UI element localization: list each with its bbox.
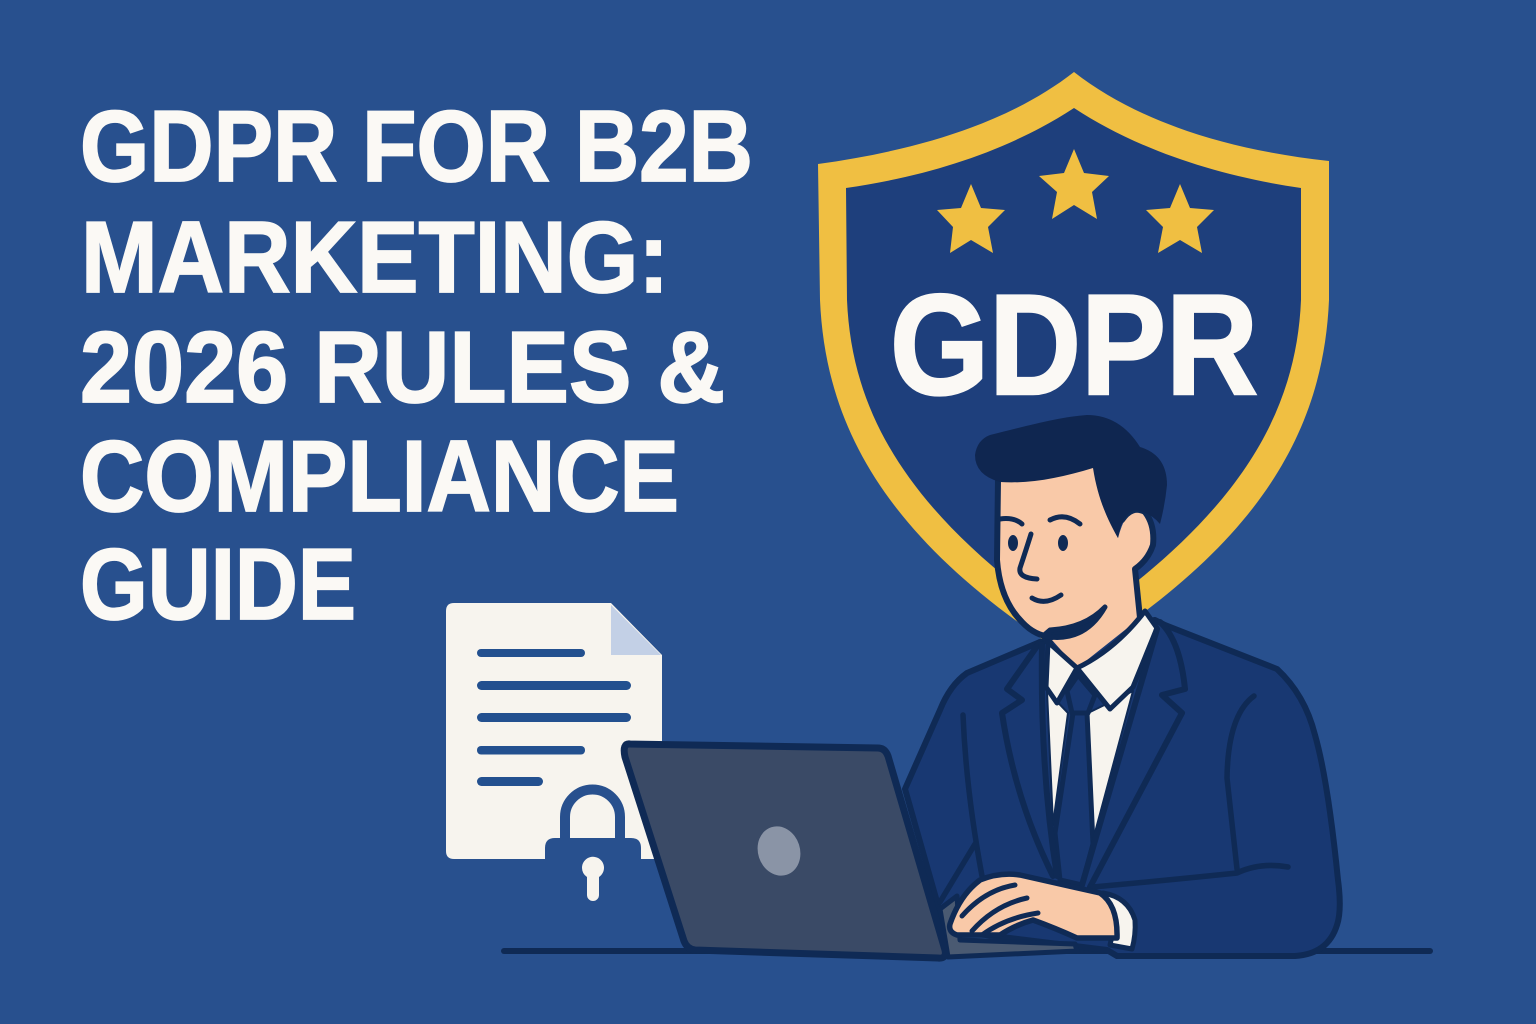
stars: [937, 149, 1214, 253]
necktie: [1055, 675, 1095, 885]
jaw shadow: [1043, 607, 1105, 637]
title: 2026 RULES &: [80, 312, 725, 424]
page fold: [611, 605, 661, 655]
title: GDPR FOR B2B: [80, 91, 753, 203]
businessman: [905, 415, 1340, 957]
neck and ear outline: [1122, 510, 1153, 618]
title: GUIDE: [80, 529, 356, 641]
laptop logo: [751, 821, 807, 881]
title: COMPLIANCE: [80, 421, 679, 533]
sleeve creases: [940, 696, 1288, 902]
hair: [975, 415, 1167, 538]
shield label: GDPR: [890, 266, 1258, 425]
document with lock icon: [446, 603, 662, 901]
laptop: [624, 744, 945, 958]
laptop keyboard base: [940, 896, 1077, 957]
jacket lapels: [1002, 622, 1185, 887]
face outline: [997, 480, 1052, 637]
desk line: [504, 948, 1430, 954]
shirt collar and front: [1046, 611, 1157, 840]
padlock: [545, 789, 641, 901]
facial features: [1000, 517, 1080, 601]
title: MARKETING:: [81, 202, 669, 314]
neck and face: [998, 465, 1155, 668]
title: [80, 91, 753, 641]
shield inner panel: [846, 108, 1301, 628]
document page: [446, 603, 662, 859]
laptop screen: [624, 744, 945, 958]
shield outer border: [818, 72, 1329, 660]
fingers: [962, 885, 1038, 935]
shield badge: [818, 72, 1329, 660]
shirt cuff: [1103, 893, 1135, 949]
text lines: [477, 649, 631, 786]
hand: [950, 874, 1117, 938]
suit jacket: [905, 620, 1340, 956]
